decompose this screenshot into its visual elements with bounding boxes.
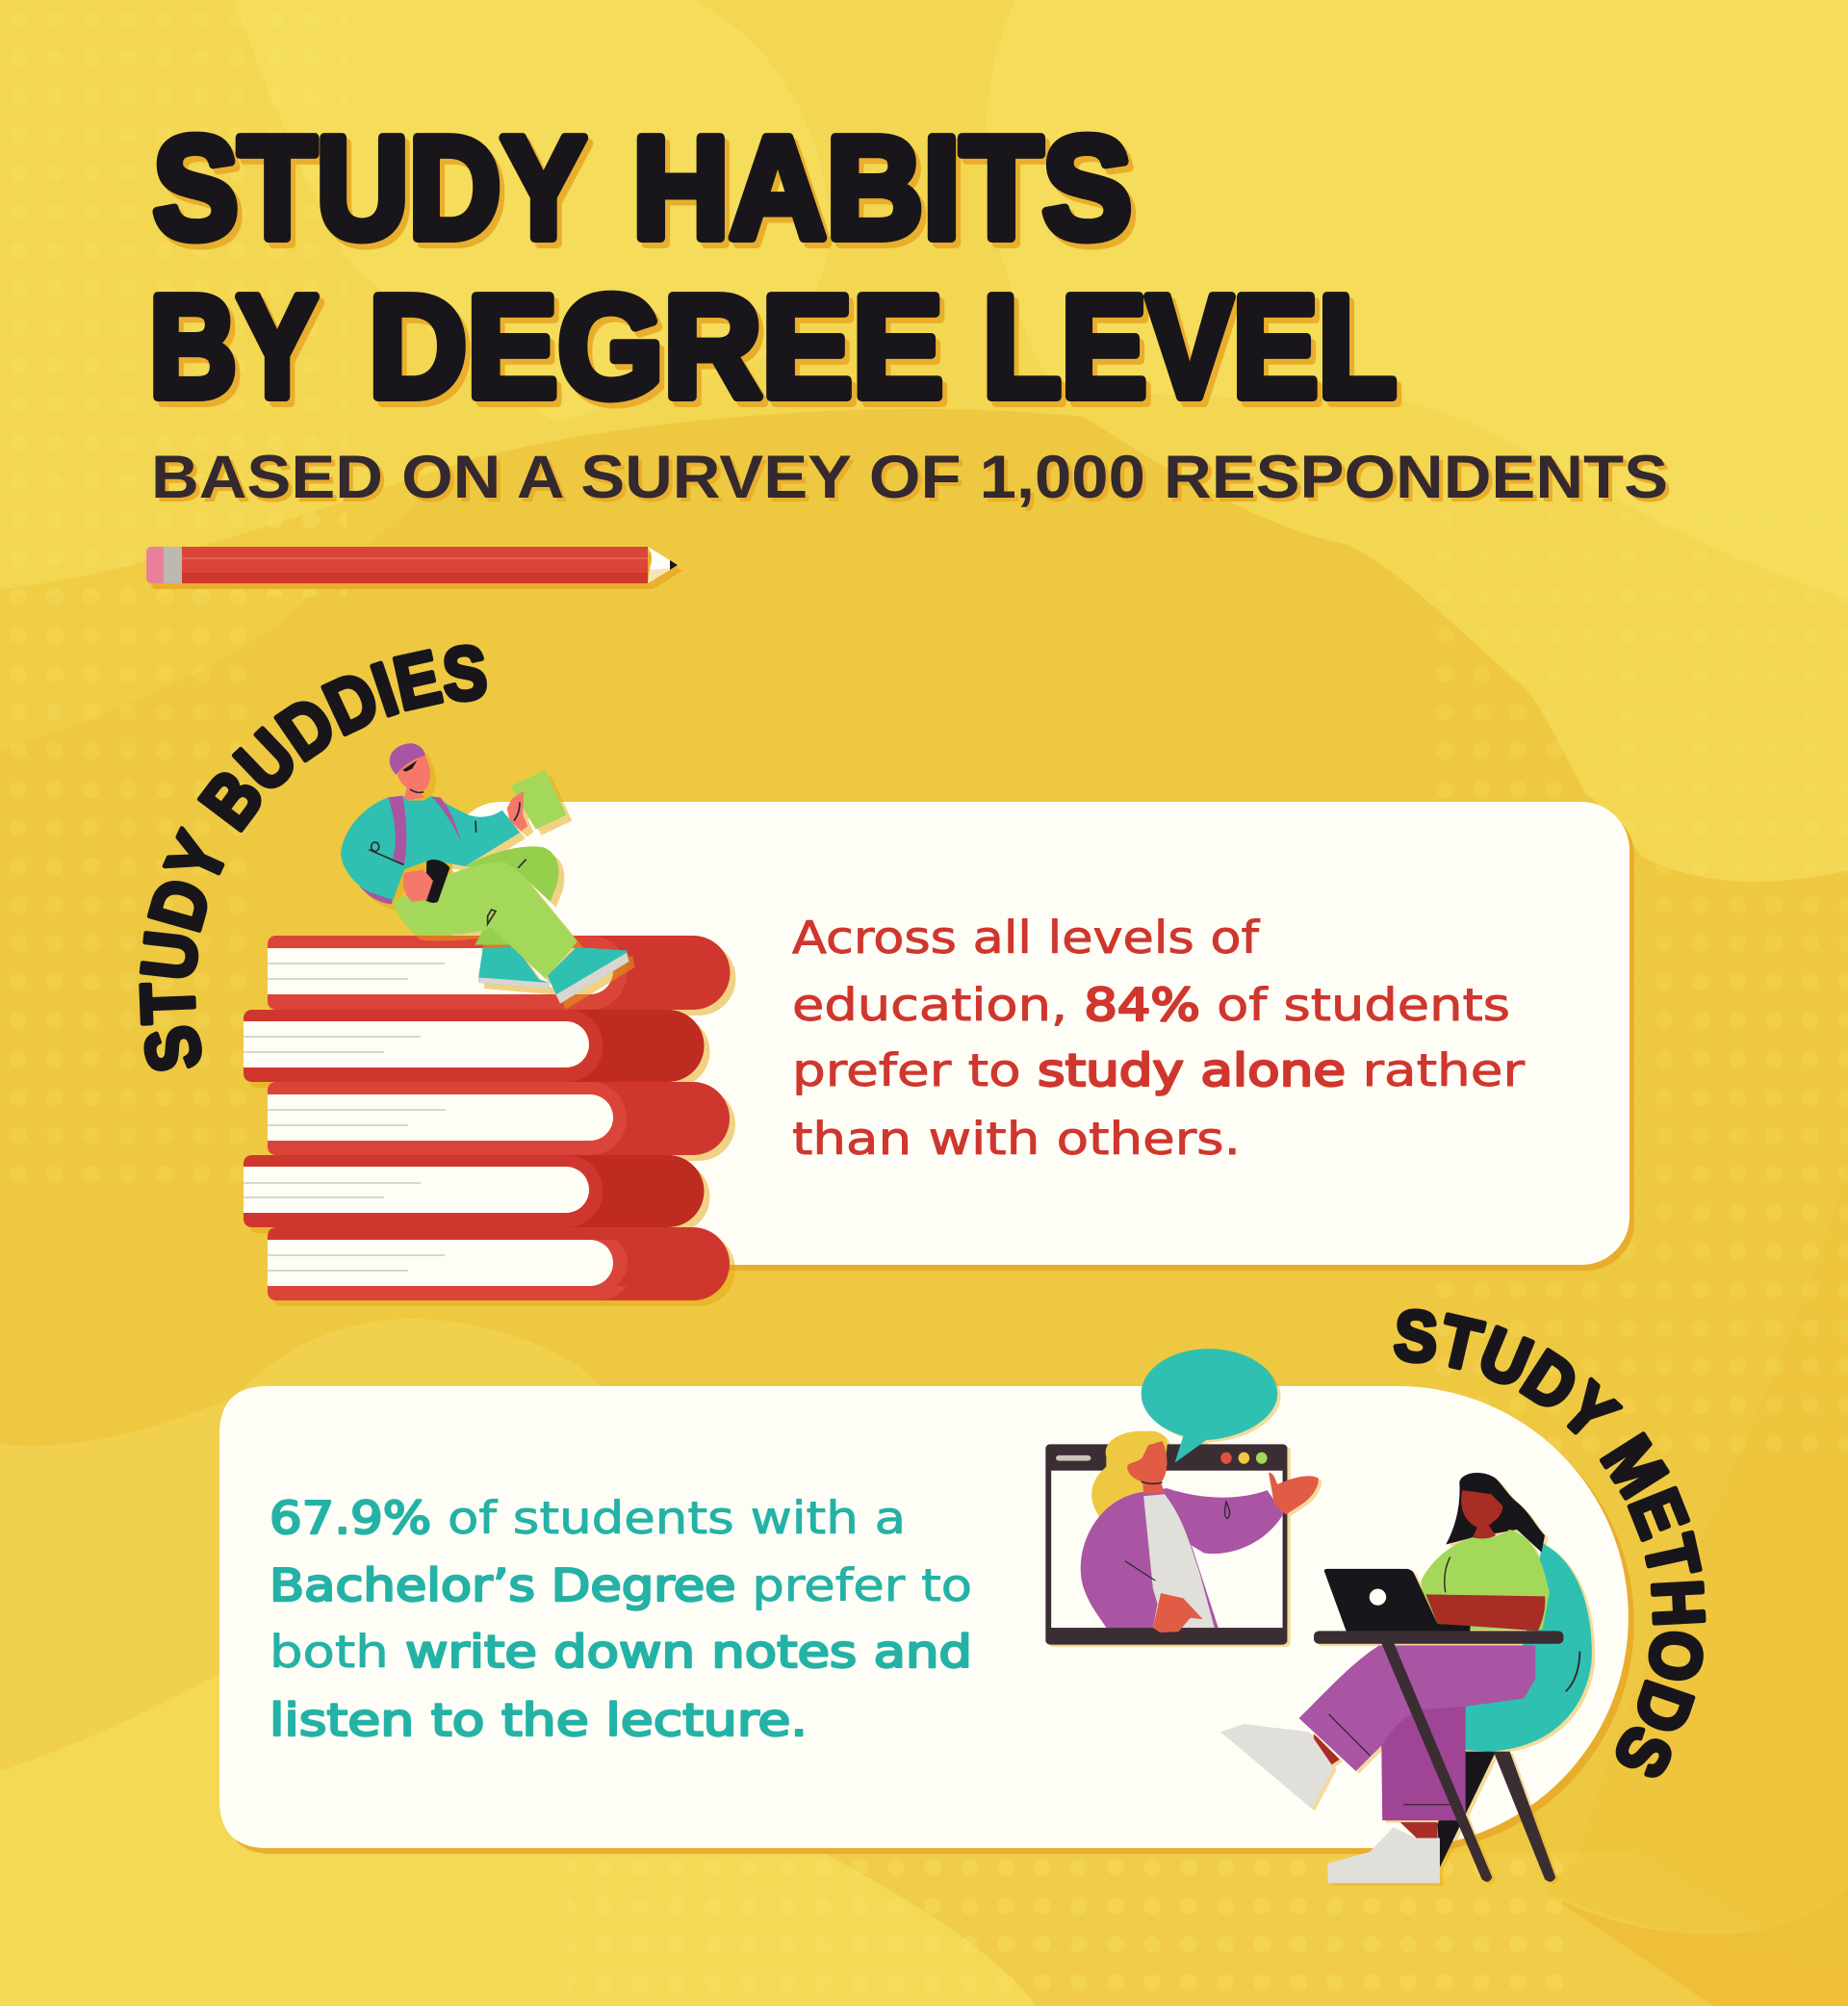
title: STUDY	[153, 106, 586, 269]
text: study methods: listen to the lecture.	[270, 1694, 808, 1746]
back leg	[465, 846, 558, 902]
heading: study buddies: STUDY BUDDIES	[139, 644, 487, 1071]
backpack	[359, 886, 395, 904]
title: DEGREE	[369, 265, 943, 427]
ankles	[1314, 1734, 1438, 1838]
chair legs	[1438, 1752, 1496, 1867]
shoes	[1220, 1724, 1333, 1809]
title	[149, 106, 1397, 427]
hair	[1091, 1431, 1168, 1520]
panel: study buddies card	[452, 802, 1630, 1265]
text: study buddies: than with others.	[792, 1113, 1241, 1165]
head	[398, 756, 430, 801]
hand waving	[1269, 1473, 1319, 1514]
shirt	[1422, 1530, 1550, 1630]
forearm	[1425, 1594, 1545, 1631]
text: study buddies: education, 84% of students	[792, 979, 1510, 1031]
book 2	[244, 1010, 705, 1082]
text: study methods: both write down notes and	[270, 1626, 972, 1678]
hand	[403, 869, 433, 902]
straps	[388, 796, 466, 866]
book 3	[268, 1082, 730, 1155]
icon: pencil	[146, 547, 678, 583]
front leg	[393, 862, 578, 979]
phone	[425, 860, 449, 903]
text: study methods: Bachelor’s Degree prefer to	[270, 1559, 972, 1611]
icon: stack of books	[244, 936, 730, 1300]
book 5	[268, 1227, 730, 1300]
cap	[390, 743, 425, 775]
face and neck	[1127, 1441, 1167, 1494]
chair seat	[1458, 1543, 1592, 1752]
speech bubble	[1142, 1349, 1277, 1463]
book 4	[244, 1155, 705, 1227]
book 1	[268, 936, 730, 1010]
torso	[341, 796, 520, 900]
title: HABITS	[632, 106, 1132, 269]
illustration: student at laptop	[1220, 1473, 1592, 1883]
face	[1461, 1490, 1502, 1541]
text: study buddies	[792, 912, 1525, 1165]
hair	[1446, 1473, 1545, 1553]
laptop	[1324, 1569, 1470, 1632]
panel: study methods card	[219, 1386, 1629, 1848]
browser window	[1045, 1444, 1287, 1645]
shoes	[478, 946, 629, 1004]
title: BY	[149, 265, 318, 427]
student body	[341, 743, 578, 979]
text: study buddies: prefer to study alone rather	[792, 1044, 1525, 1096]
illustration: online teacher	[1045, 1349, 1319, 1645]
book	[511, 770, 566, 830]
text: study methods: 67.9% of students with a	[270, 1492, 906, 1544]
illustration: student sitting on books	[341, 743, 629, 1004]
pants	[1299, 1645, 1535, 1820]
title: LEVEL	[983, 265, 1397, 427]
hand pointing	[1153, 1593, 1203, 1633]
text: study methods	[270, 1492, 972, 1746]
heading: study methods: STUDY METHODS	[1394, 1308, 1706, 1778]
subtitle: BASED ON A SURVEY OF 1,000 RESPONDENTS	[151, 444, 1668, 511]
text: study buddies: Across all levels of	[792, 912, 1261, 964]
shirt	[1143, 1494, 1215, 1628]
jacket	[1081, 1488, 1284, 1628]
desk	[1314, 1631, 1563, 1644]
hand holding book	[507, 791, 527, 831]
